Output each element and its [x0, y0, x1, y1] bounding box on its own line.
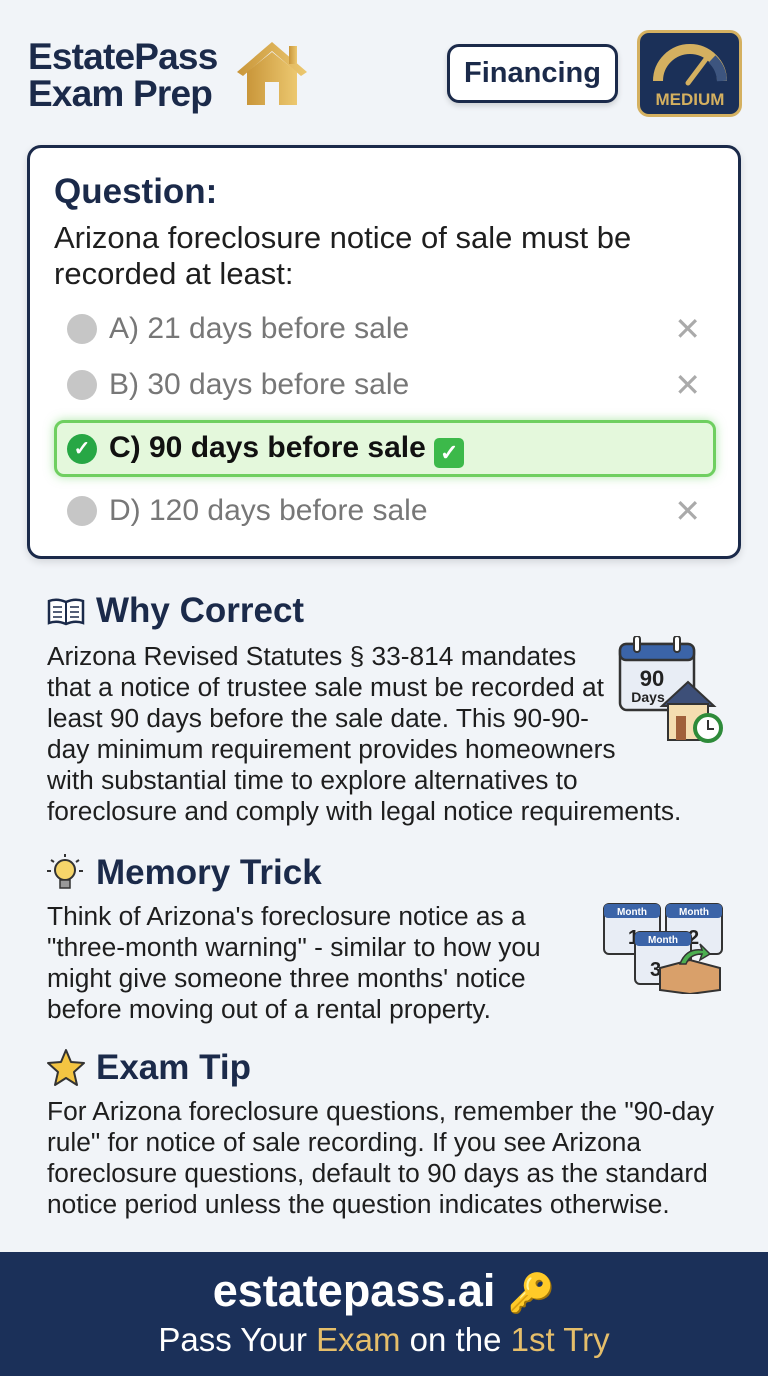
heading: Why Correct: [96, 591, 304, 630]
body text: least 90 days before the sale date. This 90-90-: [47, 703, 589, 733]
icon: month calendars with box: Month: [679, 907, 709, 918]
icon: book: [48, 598, 84, 626]
section: memory trick: [47, 853, 723, 1024]
section: exam tip: [47, 1048, 714, 1219]
body text: For Arizona foreclosure questions, remember the "90-day: [47, 1096, 714, 1126]
icon: month calendars with box: Month: [648, 935, 678, 946]
badge: Financing: Financing: [464, 57, 601, 89]
option C correct: [54, 420, 716, 477]
logo: EstatePass: [28, 36, 217, 77]
body text: [47, 641, 681, 826]
option C correct: C) 90 days before sale: [109, 431, 426, 464]
section: why correct: [47, 591, 723, 826]
icon: house: [237, 42, 307, 105]
option A: [67, 311, 701, 347]
question text: recorded at least:: [54, 256, 294, 291]
body text: notice period unless the question indicates otherwise.: [47, 1189, 670, 1219]
icon: star: [47, 1049, 85, 1086]
option C correct: ✓: [74, 438, 90, 460]
body text: before moving out of a rental property.: [47, 994, 491, 1024]
question text: [54, 220, 631, 291]
question heading: Question:: [54, 172, 217, 211]
logo: [28, 36, 217, 114]
body text: that a notice of trustee sale must be recorded at: [47, 672, 604, 702]
option B: [67, 367, 701, 403]
heading: Exam Tip: [96, 1048, 251, 1087]
icon: month calendars with box: Month: [617, 907, 647, 918]
body text: foreclosure questions, default to 90 days as the standard: [47, 1158, 708, 1188]
body text: might give someone three months' notice: [47, 963, 526, 993]
icon: bulb: [47, 854, 83, 889]
body text: with substantial time to explore alternatives to: [47, 765, 578, 795]
body text: rule" for notice of sale recording. If you see Arizona: [47, 1127, 641, 1157]
icon: month calendars with box: [603, 903, 723, 994]
footer url: estatepass.ai 🔑: [213, 1265, 555, 1316]
option D: D) 120 days before sale: [109, 494, 428, 527]
body text: day minimum requirement provides homeowners: [47, 734, 616, 764]
body text: [47, 1096, 714, 1219]
heading: Memory Trick: [96, 853, 322, 892]
logo: Exam Prep: [28, 73, 212, 114]
body text: Arizona Revised Statutes § 33-814 mandates: [47, 641, 576, 671]
tagline: Pass Your Exam on the 1st Try: [158, 1321, 610, 1358]
body text: "three-month warning" - similar to how you: [47, 932, 541, 962]
option B: B) 30 days before sale: [109, 368, 409, 401]
option A: A) 21 days before sale: [109, 312, 409, 345]
icon: month calendars with box: 1: [628, 927, 639, 949]
icon: 90 days calendar: 90: [640, 666, 664, 691]
badge: Medium: MEDIUM: [656, 90, 724, 109]
badge: Financing: [447, 44, 618, 103]
option A: ✕: [674, 311, 701, 347]
question text: Arizona foreclosure notice of sale must be: [54, 220, 631, 255]
option C correct: ✓: [440, 440, 458, 465]
body text: Think of Arizona's foreclosure notice as a: [47, 901, 526, 931]
icon: 90 days calendar: [618, 636, 723, 743]
option D: ✕: [674, 493, 701, 529]
icon: month calendars with box: 2: [688, 927, 699, 949]
icon: month calendars with box: 3: [650, 959, 661, 981]
option B: ✕: [674, 367, 701, 403]
icon: 90 days calendar: Days: [631, 689, 665, 705]
footer: [0, 1252, 768, 1376]
body text: foreclosure and comply with legal notice requirements.: [47, 796, 681, 826]
badge: Medium: [637, 30, 742, 117]
body text: [47, 901, 541, 1024]
option D: [67, 493, 701, 529]
question card: [27, 145, 741, 559]
